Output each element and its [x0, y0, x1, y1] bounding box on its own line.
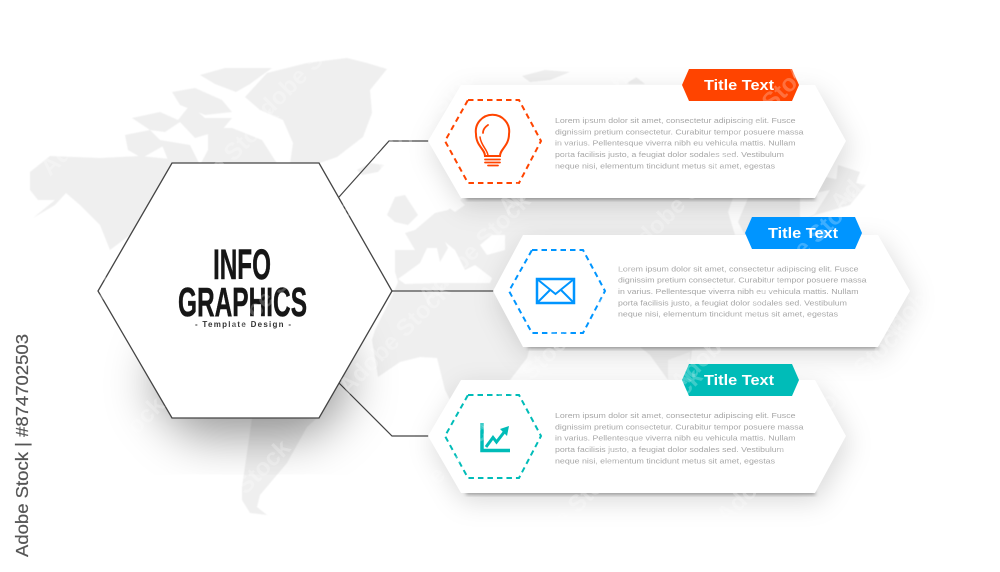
card 2 body [493, 235, 910, 347]
card 1 body text: neque nisi, elementum tincidunt metus sit amet, egestas [555, 161, 775, 170]
card 1 title badge: Title Text [704, 78, 774, 94]
stock watermarks: Adobe Stock [333, 277, 456, 400]
stock watermarks: Adobe Stock [241, 11, 364, 134]
card 2 body text: Lorem ipsum dolor sit amet, consectetur adipiscing elit. Fusce [618, 264, 858, 273]
card 1 body text: in varius. Pellentesque viverra nibh eu vehicula mattis. Nullam [555, 139, 796, 148]
card 2 body text: neque nisi, elementum tincidunt metus sit amet, egestas [618, 310, 838, 319]
stock watermarks: Adobe Stock [825, 93, 948, 216]
card 2 dashed hexagon [509, 250, 605, 333]
card 3 body text: dignissim pretium consectetur. Curabitur tempor posuere massa [555, 422, 805, 431]
stock watermarks: Adobe Stock [837, 449, 960, 572]
card 3 body text: Lorem ipsum dolor sit amet, consectetur adipiscing elit. Fusce [555, 411, 796, 420]
card 3 body text: in varius. Pellentesque viverra nibh eu vehicula mattis. Nullam [555, 434, 796, 443]
stock watermarks: Adobe Stock [47, 391, 170, 514]
stock watermarks: Adobe Stock [459, 320, 582, 443]
stock watermarks: Adobe Stock [413, 187, 536, 310]
stock watermarks: Adobe Stock [81, 191, 204, 314]
panel: card 2 [493, 217, 913, 355]
card 1 body text: Lorem ipsum dolor sit amet, consectetur adipiscing elit. Fusce [555, 116, 796, 125]
stock watermarks: Adobe Stock [287, 144, 410, 267]
stock watermarks: Adobe Stock [539, 230, 662, 353]
stock watermarks: Adobe Stock [711, 406, 834, 529]
card 1 body text [555, 116, 805, 170]
card 1 title badge [682, 69, 799, 101]
stock watermarks: Adobe Stock [665, 273, 788, 396]
central hexagon panel [98, 163, 392, 436]
central hexagon outline [98, 163, 392, 418]
stock watermarks: Adobe Stock [173, 434, 296, 557]
map seas [398, 190, 830, 380]
card 1 body [428, 85, 846, 198]
stock watermarks: Adobe Stock [619, 140, 742, 263]
stock watermarks: Adobe Stock [207, 234, 330, 357]
stock watermarks: Adobe Stock [35, 58, 158, 181]
stock watermarks: Adobe Stock [699, 50, 822, 173]
card 3 body text [555, 411, 805, 465]
stock watermarks: Adobe Stock [791, 316, 914, 439]
stock watermarks: Adobe Stock [745, 183, 868, 306]
card 2 title badge: Title Text [768, 226, 838, 242]
card 2 body text: dignissim pretium consectetur. Curabitur tempor posuere massa [618, 276, 868, 285]
card 3 dashed hexagon [445, 395, 541, 478]
title: info: INFO [213, 241, 271, 289]
card 3 body text: neque nisi, elementum tincidunt metus sit amet, egestas [555, 456, 775, 465]
card 2 body text: in varius. Pellentesque viverra nibh eu vehicula mattis. Nullam [618, 287, 858, 296]
stock watermarks: Adobe Stock [161, 101, 284, 224]
card 3 title badge [682, 364, 799, 396]
stock watermarks: Adobe Stock [367, 54, 490, 177]
stock watermarks: Adobe Stock [585, 363, 708, 486]
icon: growth chart [482, 423, 510, 450]
card 3 body [428, 380, 846, 493]
stock id label: Adobe Stock | #874702503 [12, 334, 32, 557]
card 1 dashed hexagon [445, 100, 541, 183]
connector lines [339, 141, 494, 436]
stock watermarks: Adobe Stock [379, 410, 502, 533]
title: graphics: GRAPHICS [178, 279, 307, 325]
card 3 body text: porta facilisis justo, a feugiat dolor sodales sed. Vestibulum [555, 445, 784, 454]
card 1 body text: dignissim pretium consectetur. Curabitur tempor posuere massa [555, 127, 805, 136]
panel: card 1 [428, 69, 849, 206]
background world map [30, 58, 866, 515]
icon: envelope [537, 279, 574, 303]
panel: card 3 [428, 364, 849, 501]
card 1 body text: porta facilisis justo, a feugiat dolor sodales sed. Vestibulum [555, 150, 784, 159]
stock watermarks: Adobe Stock [493, 97, 616, 220]
subtitle: - Template Design - [195, 320, 291, 329]
stock watermarks: Adobe Stock [871, 226, 994, 349]
stock watermarks: Adobe Stock [573, 7, 696, 130]
card 2 body text [618, 264, 868, 319]
card 3 title badge: Title Text [704, 373, 774, 389]
card 2 body text: porta facilisis justo, a feugiat dolor sodales sed. Vestibulum [618, 298, 847, 307]
card 2 title badge [745, 217, 862, 249]
icon: light bulb [476, 115, 509, 166]
